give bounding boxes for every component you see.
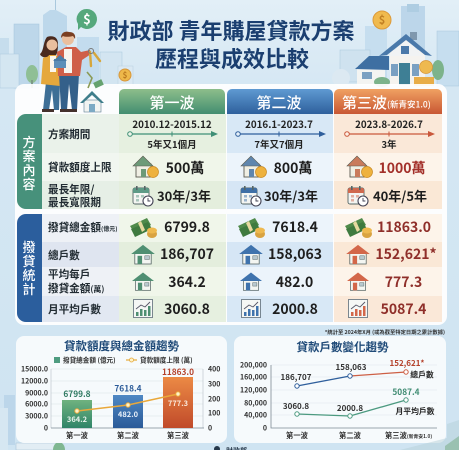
data labels: 5087.4 — [392, 386, 420, 398]
right axis: 300 — [208, 380, 220, 390]
left axis: 3000.0 — [25, 412, 48, 422]
monthly households: wave three: 5087.4 — [381, 299, 426, 319]
y axis: 80,000 — [244, 398, 267, 408]
icon: small house near couple — [80, 91, 104, 112]
illustration: right skyline and house: $ — [379, 12, 385, 28]
term: wave three: 40年/5年 — [373, 186, 427, 205]
row labels: plan content — [48, 127, 112, 210]
households: wave three: 152,621* — [375, 244, 437, 264]
right axis: 400 — [208, 364, 220, 374]
legend: 貸款額度上限 (萬) — [140, 354, 193, 364]
row labels: lending statistics: 月平均戶數 — [48, 302, 101, 317]
data labels: 152,621* — [390, 358, 424, 369]
column header: wave one — [119, 89, 225, 116]
term: wave two: 30年/3年 — [264, 186, 318, 205]
footnote: *統計至 2024年X月 (或為截至特定日期之累計數據) — [325, 328, 445, 336]
term: wave two — [241, 186, 318, 206]
line: total households — [295, 370, 408, 388]
average loan: wave one: 364.2 — [168, 272, 206, 292]
side tab: lending statistics: 撥 — [22, 237, 36, 256]
timeline: wave three: 3年 — [381, 137, 397, 151]
line value labels: 482.0 — [118, 409, 139, 420]
row labels: plan content: 最長寬限期 — [48, 195, 101, 210]
line value labels — [67, 398, 188, 425]
data labels: 158,063 — [336, 362, 367, 373]
bars — [62, 377, 193, 428]
y axis: 0 — [263, 424, 267, 434]
y axis: 40,000 — [244, 410, 267, 420]
illustration: left skyline — [0, 0, 133, 88]
icon: dollar speech bubble — [77, 9, 97, 30]
total amount: wave two: 7618.4 — [272, 217, 318, 237]
timeline: wave one: 5年又1個月 — [147, 137, 197, 151]
monthly households: wave three — [348, 299, 426, 319]
right axis — [208, 364, 220, 434]
icon: dollar speech bubble: $ — [83, 9, 91, 28]
row labels: lending statistics: 總戶數 — [48, 248, 80, 263]
title: 財政部 青年購屋貸款方案 — [108, 14, 354, 46]
side tab: plan content: 方 — [22, 132, 36, 151]
left axis: 9000.0 — [25, 388, 48, 398]
icon: gold coin: $ — [123, 70, 128, 81]
column header: wave three: 第三波 — [342, 92, 387, 113]
left axis: 6000.0 — [25, 400, 48, 410]
total amount: wave two — [238, 217, 318, 238]
column header: wave one: 第一波 — [149, 92, 195, 113]
left axis: 15000.0 — [21, 364, 48, 374]
households: wave two: 158,063 — [268, 244, 322, 264]
term: wave one: 30年/3年 — [157, 186, 211, 205]
total amount: wave one: 6799.8 — [164, 217, 210, 237]
average loan: wave three — [347, 272, 422, 292]
timeline: wave one: 2010.12-2015.12 — [132, 117, 212, 131]
y axis — [240, 360, 267, 434]
side tab: plan content — [17, 114, 42, 209]
side tab: plan content: 內 — [22, 160, 36, 179]
row labels: lending statistics: 撥貸金額(萬) — [48, 281, 104, 296]
legend — [54, 354, 193, 364]
monthly households: wave one — [134, 299, 210, 319]
column header: wave three: (新青安1.0) — [387, 98, 431, 110]
bar value labels: 7618.4 — [114, 382, 142, 394]
category labels: 第三波 — [167, 431, 190, 441]
bar value labels: 6799.8 — [63, 388, 91, 400]
side tab: plan content: 案 — [22, 146, 36, 165]
left axis: 0 — [44, 424, 48, 434]
plot grid — [51, 369, 204, 428]
category labels: 第三波(新青安1.0) — [385, 431, 432, 441]
average loan: wave two: 482.0 — [276, 272, 313, 292]
data labels: 3060.8 — [283, 401, 309, 412]
line value labels: 364.2 — [67, 414, 88, 425]
column header: wave three — [334, 89, 442, 116]
households: wave two — [239, 244, 322, 264]
side tab: lending statistics: 統 — [22, 265, 36, 284]
side tab: lending statistics: 貸 — [22, 251, 36, 270]
loan cap: wave one — [133, 156, 204, 178]
average loan: wave two — [240, 272, 313, 292]
category labels: 第一波 — [286, 431, 309, 441]
loan cap: wave three — [347, 156, 426, 178]
side tab: plan content: 容 — [22, 174, 36, 193]
icon: gold coin — [119, 69, 131, 81]
loan cap: wave one: 500萬 — [166, 158, 204, 178]
loan cap: wave two: 800萬 — [274, 158, 312, 178]
chart title: 貸款戶數變化趨勢 — [296, 339, 389, 355]
households: wave three — [346, 244, 437, 264]
category labels — [286, 431, 432, 441]
illustration: bottom left city — [0, 395, 65, 450]
category labels: 第一波 — [66, 431, 89, 441]
monthly households: wave two: 2000.8 — [272, 299, 318, 319]
illustration: young couple with keys — [40, 32, 104, 112]
bar value labels — [63, 366, 194, 400]
term: wave three — [348, 186, 427, 206]
data labels — [281, 358, 435, 417]
side tab: lending statistics: 計 — [22, 279, 36, 298]
data labels: 月平均戶數 — [396, 406, 435, 417]
monthly households: wave one: 3060.8 — [164, 299, 210, 319]
chart title: 貸款額度與總金額趨勢 — [64, 338, 179, 354]
line: monthly households — [295, 398, 408, 418]
illustration: bottom right house hint — [400, 420, 459, 450]
data labels: 186,707 — [281, 372, 312, 383]
title: 歷程與成效比較 — [155, 42, 309, 74]
side tab: lending statistics — [17, 214, 42, 322]
row labels: plan content: 貸款額度上限 — [48, 160, 112, 175]
column header: wave two — [227, 89, 333, 116]
panel: loan cap and total amount chart — [16, 336, 227, 443]
total amount: wave one — [130, 217, 210, 238]
timeline: wave two: 2016.1-2023.7 — [245, 117, 313, 131]
panel: household trend chart — [234, 336, 446, 443]
row labels: plan content: 最長年限/ — [48, 182, 94, 197]
left axis — [21, 364, 48, 434]
households: wave one: 186,707 — [160, 244, 214, 264]
timeline: wave three: 2023.8-2026.7 — [355, 117, 423, 131]
loan cap: wave three: 1000萬 — [378, 158, 426, 178]
section: plan content — [17, 114, 442, 210]
category labels — [66, 431, 190, 441]
bar value labels: 11863.0 — [162, 366, 194, 378]
row labels: lending statistics: 撥貸總金額(億元) — [48, 220, 118, 235]
title — [108, 14, 354, 74]
households: wave one — [131, 244, 214, 264]
right axis: 0 — [208, 424, 212, 434]
left axis: 12000.0 — [21, 376, 48, 386]
loan cap: wave two — [241, 156, 312, 178]
timeline: wave two: 7年又7個月 — [254, 137, 304, 151]
row labels: lending statistics: 平均每戶 — [48, 267, 90, 282]
timeline: wave one — [128, 117, 218, 151]
source mark at bottom edge — [214, 446, 247, 450]
y axis: 120,000 — [240, 386, 267, 396]
data labels: 2000.8 — [337, 403, 363, 414]
section: lending statistics — [17, 214, 442, 322]
data labels: 總戶數 — [410, 370, 434, 380]
average loan: wave one — [132, 272, 206, 292]
total amount: wave three — [345, 217, 431, 238]
legend: 撥貸總金額 (億元) — [63, 354, 116, 364]
total amount: wave three: 11863.0 — [377, 217, 431, 237]
line value labels: 777.3 — [168, 398, 188, 409]
category labels: 第二波 — [339, 431, 362, 441]
y axis: 200,000 — [240, 360, 267, 370]
plot grid — [271, 365, 437, 428]
line: loan cap — [75, 392, 180, 413]
column header: wave two: 第二波 — [256, 92, 302, 113]
right axis: 200 — [208, 394, 220, 404]
y axis: 160,000 — [240, 372, 267, 382]
row labels: plan content: 方案期間 — [48, 127, 90, 142]
monthly households: wave two — [242, 299, 318, 319]
average loan: wave three: 777.3 — [385, 272, 422, 292]
timeline: wave two — [236, 117, 326, 151]
term: wave one — [133, 186, 211, 206]
row labels: lending statistics — [48, 220, 118, 317]
category labels: 第二波 — [117, 431, 140, 441]
panel: comparison table — [15, 84, 447, 325]
illustration: right skyline and house — [332, 4, 459, 87]
right axis: 100 — [208, 408, 220, 418]
timeline: wave three — [345, 117, 435, 151]
